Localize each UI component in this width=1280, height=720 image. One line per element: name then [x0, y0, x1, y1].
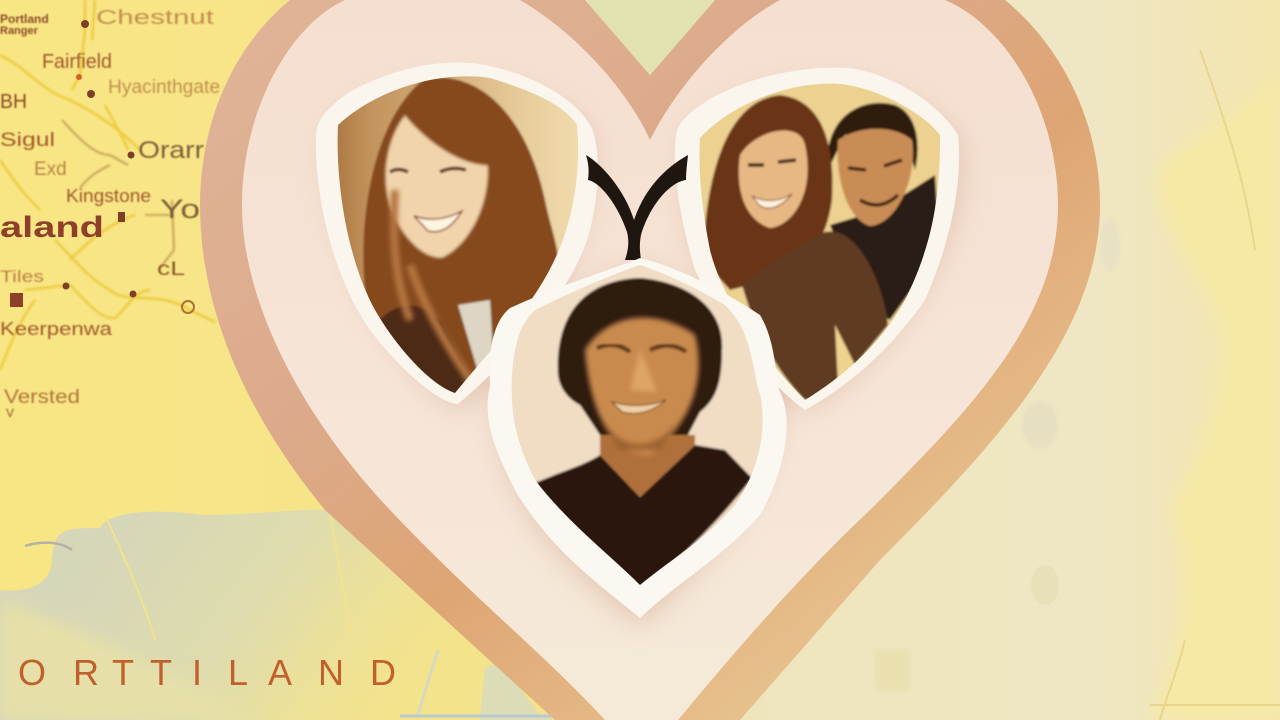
- woman's face: [739, 131, 808, 228]
- map: roads: [0, 0, 215, 370]
- stubble: [600, 426, 681, 452]
- hair strand: [394, 190, 478, 392]
- map: place labels: cL: [157, 259, 185, 280]
- map: place labels: Portland: [0, 12, 49, 26]
- heart: notch sky: [585, 0, 715, 75]
- soft shadows beneath portraits: [329, 85, 961, 625]
- map: place labels: Chestnut: [96, 7, 215, 29]
- man's hair: [827, 103, 918, 170]
- map: place labels: Yo: [160, 194, 200, 224]
- shoulder: [380, 305, 467, 393]
- map: city markers: [10, 20, 194, 313]
- hair: [363, 77, 559, 395]
- top: [456, 298, 494, 369]
- heart: centre crease: [648, 75, 652, 140]
- woman's body: [742, 231, 888, 400]
- map: place labels: Sigul: [0, 130, 55, 151]
- woman's hair: [703, 95, 832, 290]
- map: place labels: V: [6, 406, 14, 420]
- man's torso: [830, 175, 940, 320]
- map: brown road lines: [62, 120, 174, 268]
- map: place labels: Kingstone: [66, 186, 151, 206]
- eyes: [597, 345, 686, 352]
- map: place labels: Hyacinthgate: [108, 77, 220, 98]
- map: bold city name: aland: [0, 211, 104, 244]
- map: place labels: Keerpenwa: [0, 319, 113, 339]
- smile: [414, 211, 462, 232]
- map: place labels: Ranger: [0, 25, 39, 37]
- eyes: [390, 168, 466, 172]
- map: water areas: [0, 510, 560, 720]
- neck: [600, 435, 695, 497]
- map: place labels: [0, 7, 220, 420]
- portrait: couple: [675, 68, 959, 410]
- face: [585, 318, 699, 455]
- map: place labels: Versted: [4, 387, 80, 408]
- map: place labels: Fairfield: [42, 51, 112, 73]
- heart: outer band: [200, 0, 1100, 720]
- map: place labels: BH: [0, 91, 27, 113]
- map: right side coastline: [875, 50, 1280, 720]
- smile: [612, 400, 666, 414]
- map caption: ORTTILAND: [18, 652, 396, 693]
- yellow gap: [834, 325, 844, 378]
- shirt: [535, 445, 752, 590]
- heart: inner panel: [242, 0, 1058, 720]
- nose shade: [630, 350, 657, 392]
- man's face: [838, 129, 913, 226]
- Y-shaped connector: [586, 155, 688, 260]
- map: place labels: Orarr: [138, 137, 204, 164]
- map: place labels: Tiles: [0, 267, 44, 286]
- portrait: woman with long hair: [316, 63, 598, 404]
- man's eyes and smile: [848, 160, 902, 205]
- hair: [558, 278, 722, 450]
- portrait: man in dark shirt: [488, 258, 787, 618]
- map: place labels: Exd: [34, 159, 67, 180]
- face: [385, 115, 488, 258]
- woman's eyes and smile: [748, 160, 796, 165]
